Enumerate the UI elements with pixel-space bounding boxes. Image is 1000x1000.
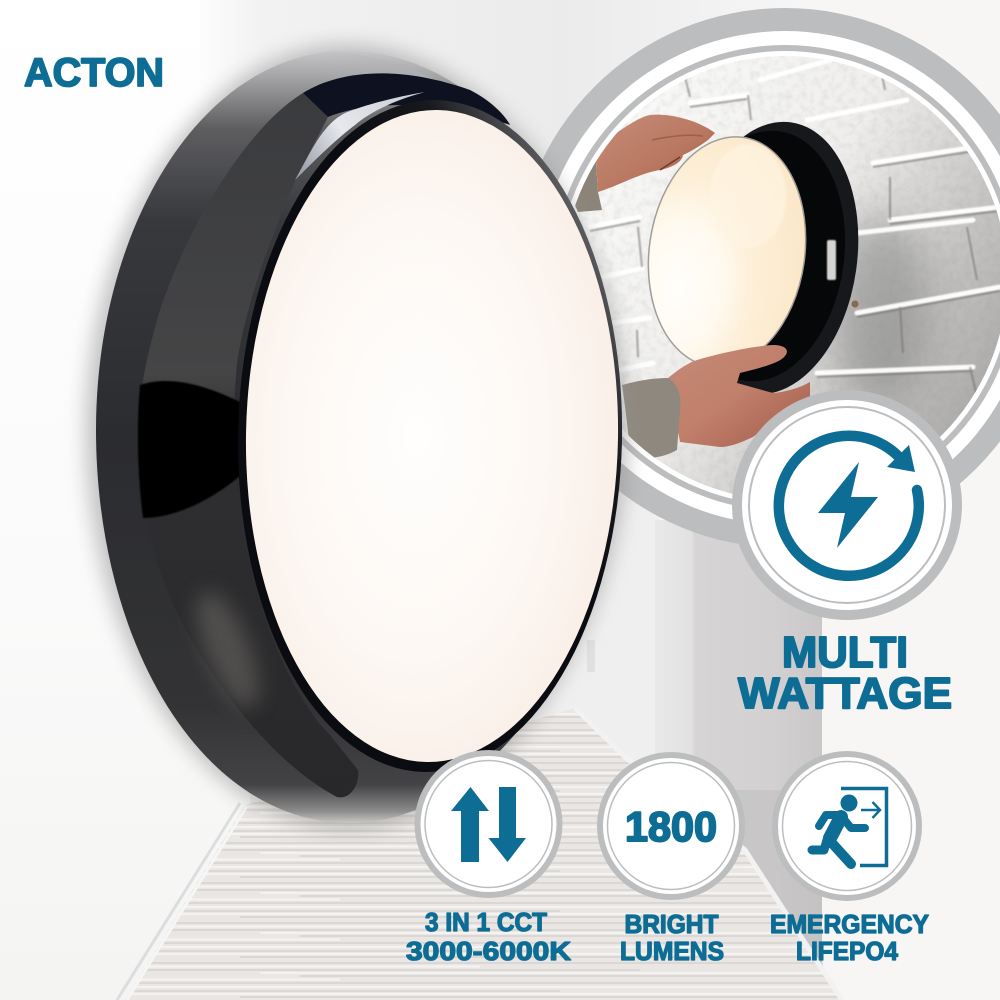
icon: up arrow <box>451 787 489 862</box>
icon: down arrow <box>488 787 526 862</box>
inset photo: installing the light on a brick wall <box>560 50 1000 510</box>
label: emergency LiFePO4: EMERGENCY <box>770 909 929 939</box>
label: multi wattage: MULTI <box>782 628 908 677</box>
lamp front bezel <box>232 97 628 775</box>
badge: colour temperature arrows <box>414 750 562 898</box>
badge: emergency exit <box>772 751 922 901</box>
lamp outer rim <box>96 51 622 823</box>
lamp recessed body <box>138 93 358 797</box>
brick wall <box>560 50 1000 510</box>
lamp gloss black patch <box>138 381 240 518</box>
heading: ACTON: ACTON <box>24 51 164 95</box>
icon: lightning bolt <box>818 462 878 548</box>
icon: exit arrow <box>861 802 880 818</box>
icon: running figure <box>812 794 865 864</box>
inset photo frame <box>515 8 1000 548</box>
lamp recess lower highlight <box>184 584 272 716</box>
lamp white diffuser <box>240 107 624 765</box>
lamp gloss highlight <box>295 92 425 180</box>
label: emergency LiFePO4: LIFEPO4 <box>796 936 899 966</box>
label: 3 in 1 CCT: 3000-6000K <box>406 936 571 966</box>
icon: circular arrow <box>779 436 919 576</box>
icon: door frame <box>841 788 886 866</box>
lamp being fitted <box>648 122 858 393</box>
label: emergency LiFePO4 <box>770 909 929 966</box>
badge: 1800 lumens <box>597 752 745 900</box>
label: multi wattage: WATTAGE <box>738 669 952 718</box>
label: bright lumens: BRIGHT <box>624 909 719 939</box>
label: multi wattage <box>738 628 952 718</box>
label: 3 in 1 CCT <box>406 907 571 966</box>
upper hand and sleeve <box>568 115 715 212</box>
soft shadow behind main lamp <box>86 45 628 830</box>
badge: multi wattage icon <box>732 390 962 620</box>
lamp glossy top band <box>303 73 510 125</box>
label: bright lumens: LUMENS <box>620 936 724 966</box>
number: 1800: 1800 <box>625 803 717 850</box>
label: 3 in 1 CCT: 3 IN 1 CCT <box>425 907 547 937</box>
lower hand and sleeve <box>622 345 810 458</box>
lamp upper-right rim highlight <box>320 52 622 430</box>
main product: round bulkhead lamp <box>96 51 628 823</box>
label: bright lumens <box>620 909 724 966</box>
